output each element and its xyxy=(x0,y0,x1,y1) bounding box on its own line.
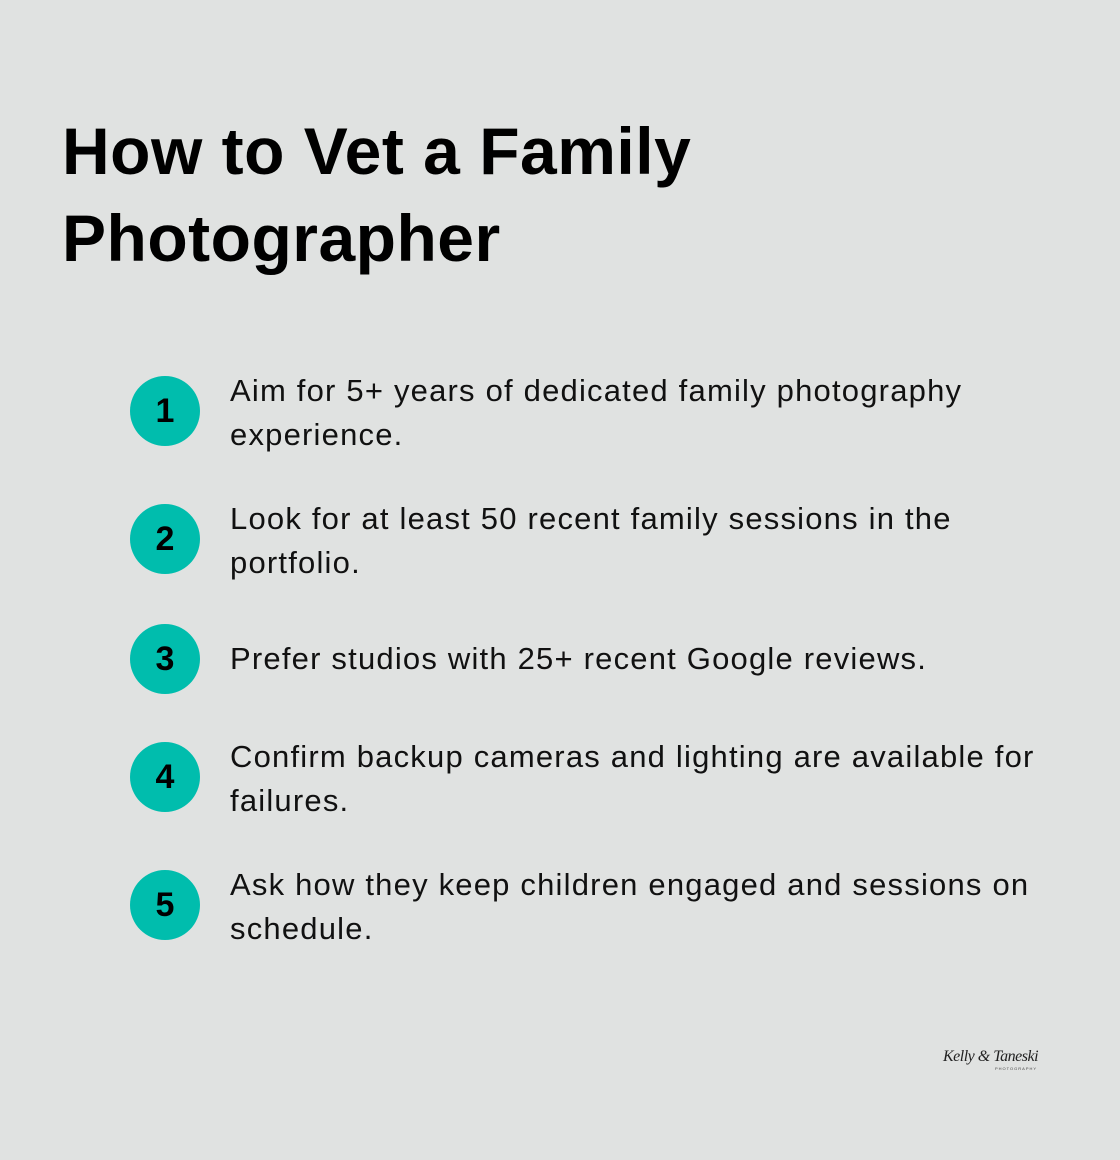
text 1: experience. xyxy=(230,417,403,452)
item 1 xyxy=(130,373,962,452)
circle 3 xyxy=(130,624,200,694)
logo: PHOTOGRAPHY xyxy=(995,1066,1037,1071)
item 5 xyxy=(130,867,1029,946)
circle 4: 4 xyxy=(156,758,174,796)
item 2 xyxy=(130,501,952,580)
circle 1: 1 xyxy=(156,392,174,430)
circle 4 xyxy=(130,742,200,812)
text 5: Ask how they keep children engaged and sessions on xyxy=(230,867,1029,902)
circle 3: 3 xyxy=(156,640,174,678)
text 4: failures. xyxy=(230,783,349,818)
text 1 xyxy=(230,373,962,452)
circle 1 xyxy=(130,376,200,446)
text 4 xyxy=(230,739,1035,818)
text 2 xyxy=(230,501,952,580)
text 3: Prefer studios with 25+ recent Google reviews. xyxy=(230,641,927,676)
circle 5: 5 xyxy=(156,886,174,924)
title xyxy=(62,114,691,275)
title: How to Vet a Family xyxy=(62,114,691,188)
logo: Kelly & Taneski xyxy=(943,1048,1038,1065)
title: Photographer xyxy=(62,201,501,275)
text 1: Aim for 5+ years of dedicated family photography xyxy=(230,373,962,408)
text 5 xyxy=(230,867,1029,946)
text 2: Look for at least 50 recent family sessions in the xyxy=(230,501,952,536)
item 4 xyxy=(130,739,1035,818)
text 2: portfolio. xyxy=(230,545,361,580)
circle 2: 2 xyxy=(156,520,174,558)
text 4: Confirm backup cameras and lighting are available for xyxy=(230,739,1035,774)
circle 2 xyxy=(130,504,200,574)
text 5: schedule. xyxy=(230,911,374,946)
item 3 xyxy=(130,624,927,694)
circle 5 xyxy=(130,870,200,940)
